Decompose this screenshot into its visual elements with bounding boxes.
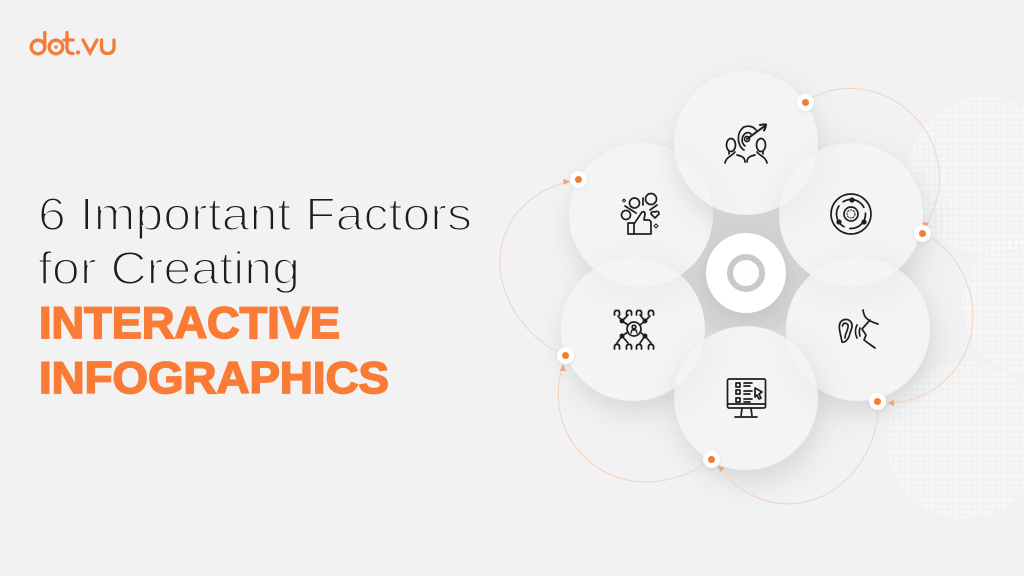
panel: factor circle, customer reactions bbox=[569, 143, 713, 287]
connector node, right upper bbox=[914, 225, 931, 242]
title line: INFOGRAPHICS: INFOGRAPHICS bbox=[39, 354, 389, 403]
center donut bbox=[706, 233, 786, 313]
connector node, top bbox=[797, 94, 814, 111]
panel: factor circle, orbit bbox=[779, 143, 923, 287]
title bbox=[38, 188, 472, 403]
panel: factor circle, audience targeting bbox=[674, 71, 818, 215]
logo bbox=[28, 28, 116, 56]
title line: for Creating: for Creating bbox=[38, 242, 300, 294]
title line: INTERACTIVE: INTERACTIVE bbox=[39, 299, 340, 348]
shadow in the central gap bbox=[683, 210, 809, 336]
logo: dot.vu bbox=[28, 28, 31, 29]
title line: 6 Important Factors: 6 Important Factors bbox=[38, 188, 472, 240]
panel: factor circle, listening bbox=[786, 257, 930, 401]
connector node, right lower bbox=[869, 393, 886, 410]
connector node, left upper bbox=[570, 171, 587, 188]
panel: factor circle, on-screen quiz bbox=[674, 326, 818, 470]
connector node, left lower bbox=[557, 347, 574, 364]
panel: factor circle, network bbox=[561, 257, 705, 401]
connector node, bottom bbox=[703, 451, 720, 468]
